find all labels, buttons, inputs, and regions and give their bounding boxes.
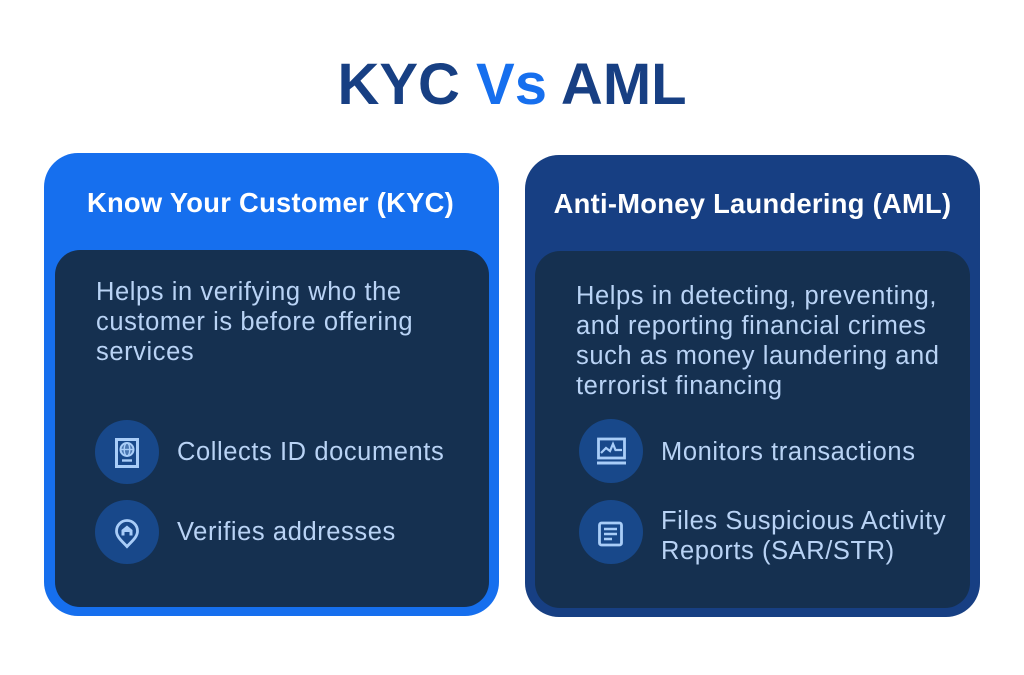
text: AML description: such as money laundering and <box>576 342 940 370</box>
text: AML description: Helps in detecting, preventing, <box>576 282 937 310</box>
heading: KYC: Know Your Customer (KYC) <box>87 187 454 218</box>
text: verifies addresses: Verifies addresses <box>177 518 396 546</box>
text: KYC description: customer is before offering <box>96 308 413 336</box>
text: files suspicious activity reports <box>661 507 946 565</box>
text: files suspicious activity reports: Reports (SAR/STR) <box>661 537 895 565</box>
panel: AML <box>525 155 980 617</box>
text: KYC description: services <box>96 338 194 366</box>
text: KYC description <box>96 278 413 366</box>
icon: passport <box>95 420 159 484</box>
inner panel: AML <box>535 251 970 608</box>
text: monitors transactions: Monitors transactions <box>661 438 916 466</box>
icon: address pin <box>95 500 159 564</box>
text: files suspicious activity reports: Files Suspicious Activity <box>661 507 946 535</box>
heading: AML: Anti-Money Laundering (AML) <box>554 188 951 219</box>
text: AML description: and reporting financial crimes <box>576 312 926 340</box>
text: KYC description: Helps in verifying who the <box>96 278 402 306</box>
title: KYC Vs AML <box>337 52 687 117</box>
inner panel: KYC <box>55 250 489 607</box>
icon: monitor <box>579 419 643 483</box>
icon: report <box>579 500 643 564</box>
panel: KYC <box>44 153 499 616</box>
text: AML description: terrorist financing <box>576 372 783 400</box>
text: AML description <box>576 282 940 400</box>
text: collects ID documents: Collects ID documents <box>177 438 444 466</box>
